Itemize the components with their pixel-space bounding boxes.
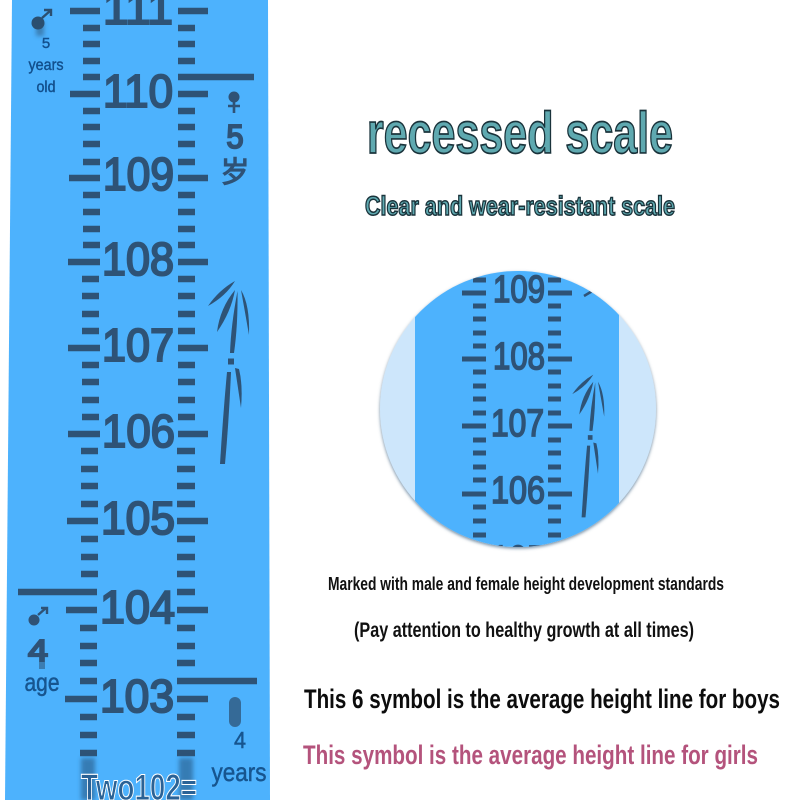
label: female 4 years xyxy=(212,697,266,787)
label: female 4 years: 4 xyxy=(234,727,246,753)
magnified numbers: 105 xyxy=(491,539,545,581)
magnified numbers xyxy=(492,274,544,547)
magnified numbers: 108 xyxy=(493,336,545,378)
magnified numbers: 107 xyxy=(491,403,544,445)
ruler numbers: 103 xyxy=(100,670,174,722)
magnified ticks xyxy=(462,280,572,535)
icon: bamboo xyxy=(208,281,249,464)
label: male 4 age: age xyxy=(24,669,60,697)
top edge of 109 leaf xyxy=(584,290,594,296)
subtitle: Clear and wear-resistant scale xyxy=(365,191,675,221)
ruler numbers xyxy=(100,0,175,722)
label: female 4 years: years xyxy=(212,757,266,787)
text: healthy growth note: (Pay attention to healthy growth at all times) xyxy=(354,619,694,642)
title: recessed scale xyxy=(367,101,673,166)
ruler numbers: 107 xyxy=(102,319,174,371)
label: male 5 years old: years xyxy=(28,57,64,74)
label: male 5 years old xyxy=(28,10,64,96)
magnified numbers: 109 xyxy=(493,269,545,311)
magnified bamboo xyxy=(572,375,604,517)
ruler numbers: 110 xyxy=(103,65,173,117)
smudges over lower ticks xyxy=(81,758,193,800)
label: female 5 years: 5 xyxy=(226,118,244,155)
label: male 4 age: 4 xyxy=(28,633,48,668)
ruler tick marks xyxy=(18,11,257,753)
label: female 5 years xyxy=(220,92,250,189)
ruler numbers: 104 xyxy=(100,581,175,633)
magnified numbers: 106 xyxy=(491,470,545,512)
label: male 5 years old: 5 xyxy=(42,35,50,52)
magnified scale circle xyxy=(378,270,658,551)
label: female 5 years: 岁 xyxy=(220,156,250,189)
ruler numbers: 105 xyxy=(101,492,175,544)
ruler numbers: 109 xyxy=(103,148,174,200)
ruler strip xyxy=(5,0,270,800)
ruler numbers: 108 xyxy=(102,233,174,285)
label: male 5 years old: old xyxy=(36,79,56,96)
ruler numbers: 106 xyxy=(102,405,175,457)
label: male 4 age xyxy=(24,608,60,697)
